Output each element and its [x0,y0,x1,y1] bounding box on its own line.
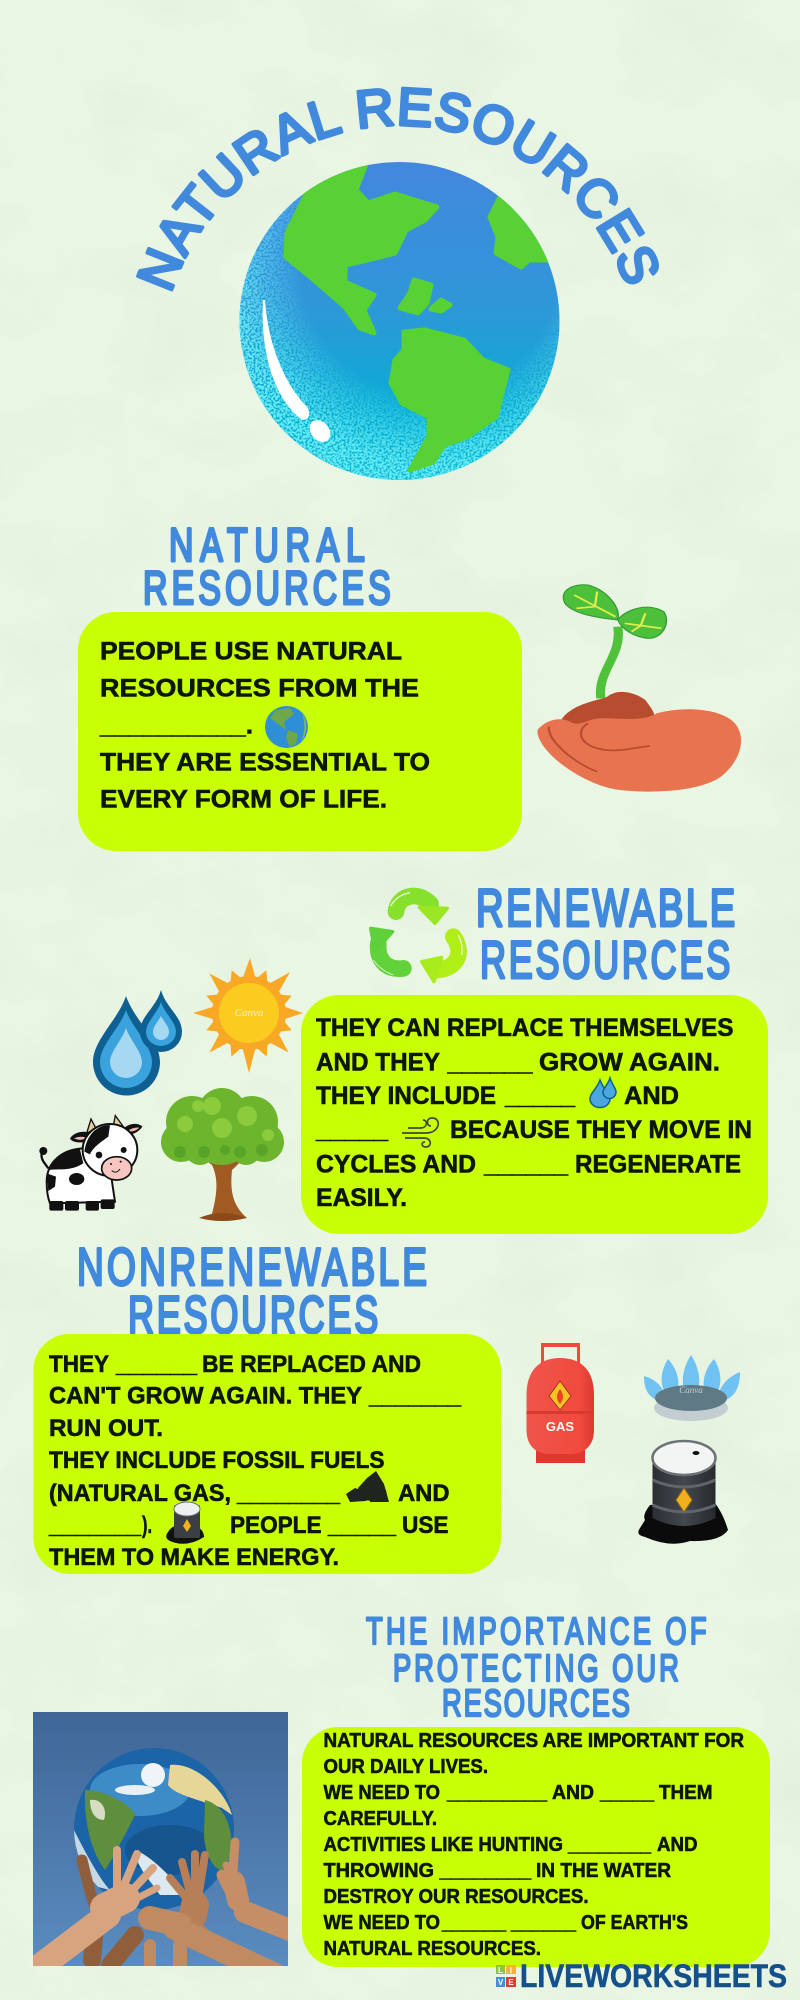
panel: nonrenewable resources text: _______ [48,1512,142,1539]
panel: importance text: ______ [510,1912,577,1934]
panel: importance text: CAREFULLY. [324,1808,437,1830]
panel: renewable resources text: AND THEY [316,1048,440,1076]
icon: coal [346,1471,389,1502]
panel: importance text: THEM [659,1782,712,1804]
icon: wind [402,1118,438,1147]
heading: Natural Resources: NATURAL [169,519,365,571]
panel: nonrenewable resources text: AND [398,1480,450,1507]
panel: importance text: THROWING [324,1860,434,1882]
heading: Nonrenewable Resources: NONRENEWABLE [77,1237,427,1297]
heading: Renewable Resources: RESOURCES [480,930,730,990]
heading: Nonrenewable Resources: RESOURCES [128,1285,378,1345]
panel: importance text: NATURAL RESOURCES. [324,1938,541,1960]
panel: natural resources text: PEOPLE USE NATURAL [100,638,402,666]
panel: renewable resources text: GROW AGAIN. [539,1048,720,1076]
panel: importance text: OF EARTH'S [581,1912,688,1934]
icon: tree [161,1088,284,1221]
heading: Renewable Resources [476,878,735,990]
panel: importance text: AND [552,1782,594,1804]
panel: nonrenewable resources text: ). [142,1512,152,1539]
panel: importance text: NATURAL RESOURCES ARE IMPORTANT FOR [324,1730,745,1752]
panel: nonrenewable resources text: (NATURAL GAS, [49,1480,231,1507]
heading: Natural Resources [143,519,391,614]
illustration: seedling in a hand [537,585,741,792]
icon: sun: Canva [235,1007,264,1019]
panel: renewable resources text: EASILY. [316,1184,407,1212]
heading: Nonrenewable Resources [77,1237,427,1345]
logo: Liveworksheets: V [498,1978,504,1987]
panel: natural resources text: __________. [99,712,253,740]
panel: renewable resources text: BECAUSE THEY MOVE IN [450,1116,752,1144]
panel: importance text: WE NEED TO [324,1782,440,1804]
icon: gas cylinder: GAS [546,1419,574,1434]
icon: small oil barrel [166,1502,204,1544]
heading: The importance of protecting our resources: PROTECTING OUR [393,1648,679,1690]
logo: Liveworksheets: E [508,1978,514,1987]
icon: gas burner: Canva [679,1385,703,1395]
illustration: earth globe [240,162,560,480]
panel: importance text [302,1727,770,1967]
title: curved Natural Resources: NATURAL RESOURCES [136,86,659,292]
panel: importance text: ________ [438,1860,532,1882]
panel: nonrenewable resources text: ________ [236,1480,341,1507]
heading: The importance of protecting our resources [366,1611,707,1725]
panel: nonrenewable resources text: RUN OUT. [49,1415,163,1442]
panel: nonrenewable resources text: PEOPLE [230,1512,322,1539]
panel: importance text: WE NEED TO [324,1912,440,1934]
heading: Renewable Resources: RENEWABLE [476,878,735,937]
panel: nonrenewable resources text: CAN'T GROW AGAIN. THEY [49,1382,362,1410]
icon: water drops [93,990,182,1096]
panel: renewable resources text: CYCLES AND [316,1150,476,1178]
panel: importance text: ACTIVITIES LIKE HUNTING [324,1834,563,1856]
icon: gas cylinder [526,1343,594,1463]
panel: nonrenewable resources text: _____ [327,1512,397,1539]
logo: Liveworksheets: I [510,1966,512,1975]
logo: Liveworksheets: L [498,1966,503,1975]
panel: nonrenewable resources text: THEY INCLUDE FOSSIL FUELS [49,1447,384,1474]
icon: sun [193,958,303,1073]
panel: importance text: _____ [599,1782,655,1804]
panel: importance text: ______ [441,1912,507,1934]
panel: renewable resources text: REGENERATE [575,1150,741,1178]
icon: oil barrel [638,1441,728,1544]
panel: nonrenewable resources text: ______ [115,1351,198,1378]
panel: importance text: AND [657,1834,698,1856]
panel: importance text: DESTROY OUR RESOURCES. [324,1886,588,1908]
panel: importance text: IN THE WATER [536,1860,672,1882]
panel: nonrenewable resources text: THEM TO MAKE ENERGY. [49,1544,339,1571]
panel: natural resources text [78,612,522,851]
panel: renewable resources text [301,995,768,1234]
panel: natural resources text: THEY ARE ESSENTIAL TO [100,748,430,776]
panel: importance text: _________ [446,1782,548,1804]
icon: cow [39,1116,142,1211]
panel: importance text: OUR DAILY LIVES. [324,1756,488,1778]
panel: nonrenewable resources text [34,1334,501,1574]
panel: renewable resources text: THEY INCLUDE [316,1082,496,1110]
photo: hands holding the earth [25,1712,295,1978]
panel: nonrenewable resources text: _______ [368,1382,462,1410]
icon: small earth [265,706,308,748]
panel: nonrenewable resources text: BE REPLACED AND [202,1351,421,1378]
panel: natural resources text: RESOURCES FROM THE [100,674,419,702]
panel: nonrenewable resources text: THEY [49,1351,109,1378]
panel: natural resources text: EVERY FORM OF LIFE. [100,786,387,814]
icon: small water drops [590,1078,616,1108]
heading: Natural Resources: RESOURCES [143,562,391,614]
heading: The importance of protecting our resources: THE IMPORTANCE OF [366,1611,707,1653]
heading: The importance of protecting our resources: RESOURCES [442,1683,630,1725]
panel: renewable resources text: _____ [504,1082,576,1110]
panel: nonrenewable resources text: USE [402,1512,448,1539]
icon: gas burner [644,1355,740,1421]
panel: renewable resources text: AND [624,1082,679,1110]
panel: renewable resources text: THEY CAN REPLACE THEMSELVES [316,1014,734,1042]
icon: recycle arrows [371,893,462,982]
panel: renewable resources text: _____ [315,1116,389,1144]
panel: importance text: ________ [567,1834,652,1856]
panel: renewable resources text: ______ [446,1048,534,1076]
panel: renewable resources text: ______ [483,1150,569,1178]
